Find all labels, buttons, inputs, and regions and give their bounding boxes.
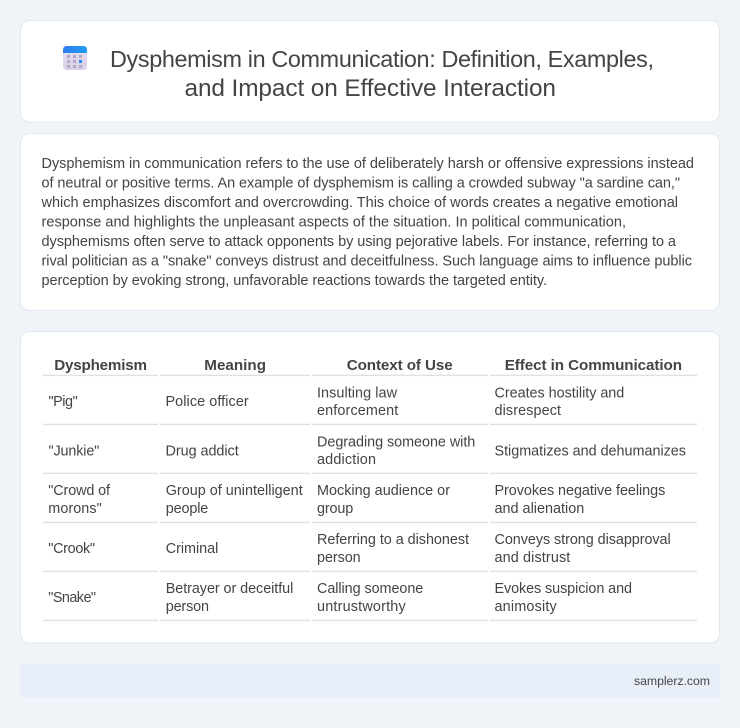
text block: definition: response and highlights the unpleasant aspects of the situation. In political communication, xyxy=(42,214,626,230)
table row: Junkie: "Junkie" xyxy=(48,443,99,459)
table row: Junkie: Degrading someone with xyxy=(317,434,475,450)
text block: definition: which emphasizes discomfort and overcrowding. This choice of words creates a negative emotional xyxy=(40,195,678,211)
table row: Crowd of morons: and alienation xyxy=(494,501,584,517)
text block: definition: Dysphemism in communication refers to the use of deliberately harsh or offensive expressions instead xyxy=(42,156,694,172)
table row: Pig: enforcement xyxy=(317,403,398,419)
table row: Snake: untrustworthy xyxy=(317,599,406,615)
panel: title card xyxy=(20,20,720,122)
table row: Crook xyxy=(43,532,697,572)
table row: Crook: Criminal xyxy=(166,541,218,557)
text block: definition: perception by evoking strong, unfavorable reactions towards the targeted entity. xyxy=(42,273,547,289)
table row: Pig: Creates hostility and xyxy=(494,385,624,401)
table row: Snake: "Snake" xyxy=(48,590,96,606)
table row: Junkie: Stigmatizes and dehumanizes xyxy=(494,443,686,459)
panel: dysphemism table xyxy=(20,332,720,643)
table row: Crowd of morons: group xyxy=(317,501,353,517)
table row: Crowd of morons: Provokes negative feelings xyxy=(494,483,665,499)
table row: Snake: person xyxy=(166,599,209,615)
title: Dysphemism in Communication: Definition, Examples, xyxy=(110,46,654,72)
text block: definition xyxy=(40,156,694,289)
text block: definition: of neutral or positive terms. An example of dysphemism is calling a crowded subway "a sardine can," xyxy=(42,176,680,192)
text block: definition: rival politician as a "snake" conveys distrust and deceitfulness. Such language aims to influence public xyxy=(42,254,692,270)
table row: Crowd of morons: morons" xyxy=(48,501,102,517)
table header xyxy=(43,357,697,376)
table header: Context of Use xyxy=(347,357,453,374)
footer source text: samplerz.com xyxy=(634,674,710,688)
table row: Crowd of morons: Group of unintelligent xyxy=(166,483,303,499)
table header: Meaning xyxy=(204,357,266,374)
table row: Crowd of morons xyxy=(43,483,697,523)
table row: Crowd of morons: Mocking audience or xyxy=(317,483,450,499)
table row: Crook: "Crook" xyxy=(48,541,95,557)
table row: Crook: and distrust xyxy=(494,550,570,566)
table row: Snake: Betrayer or deceitful xyxy=(166,581,293,597)
panel: definition paragraph xyxy=(20,134,720,310)
title xyxy=(110,46,654,102)
table row: Crook: Referring to a dishonest xyxy=(317,532,469,548)
table row: Snake xyxy=(43,581,697,621)
title: and Impact on Effective Interaction xyxy=(184,75,556,102)
table row: Snake: Evokes suspicion and xyxy=(494,581,632,597)
table row: Junkie: addiction xyxy=(317,452,376,468)
table row: Pig: Insulting law xyxy=(317,385,398,401)
table row: Crowd of morons: people xyxy=(166,501,208,517)
footer bar xyxy=(20,664,720,698)
table row: Pig: disrespect xyxy=(494,403,561,419)
table row: Junkie xyxy=(43,434,697,474)
table header: Dysphemism xyxy=(54,357,147,374)
table row: Pig xyxy=(43,385,697,425)
text block: definition: dysphemisms often serve to attack opponents by using pejorative labels. For instance, referring to a xyxy=(42,234,677,250)
table row: Crowd of morons: "Crowd of xyxy=(48,483,111,499)
table row: Snake: animosity xyxy=(494,599,557,615)
table row: Junkie: Drug addict xyxy=(166,443,239,459)
table row: Crook: Conveys strong disapproval xyxy=(494,532,671,548)
table row: Snake: Calling someone xyxy=(317,581,423,597)
table row: Pig: "Pig" xyxy=(48,394,78,410)
icon: calendar xyxy=(63,46,87,70)
table row: Pig: Police officer xyxy=(166,394,249,410)
table header: Effect in Communication xyxy=(505,357,682,374)
table row: Crook: person xyxy=(317,550,361,566)
